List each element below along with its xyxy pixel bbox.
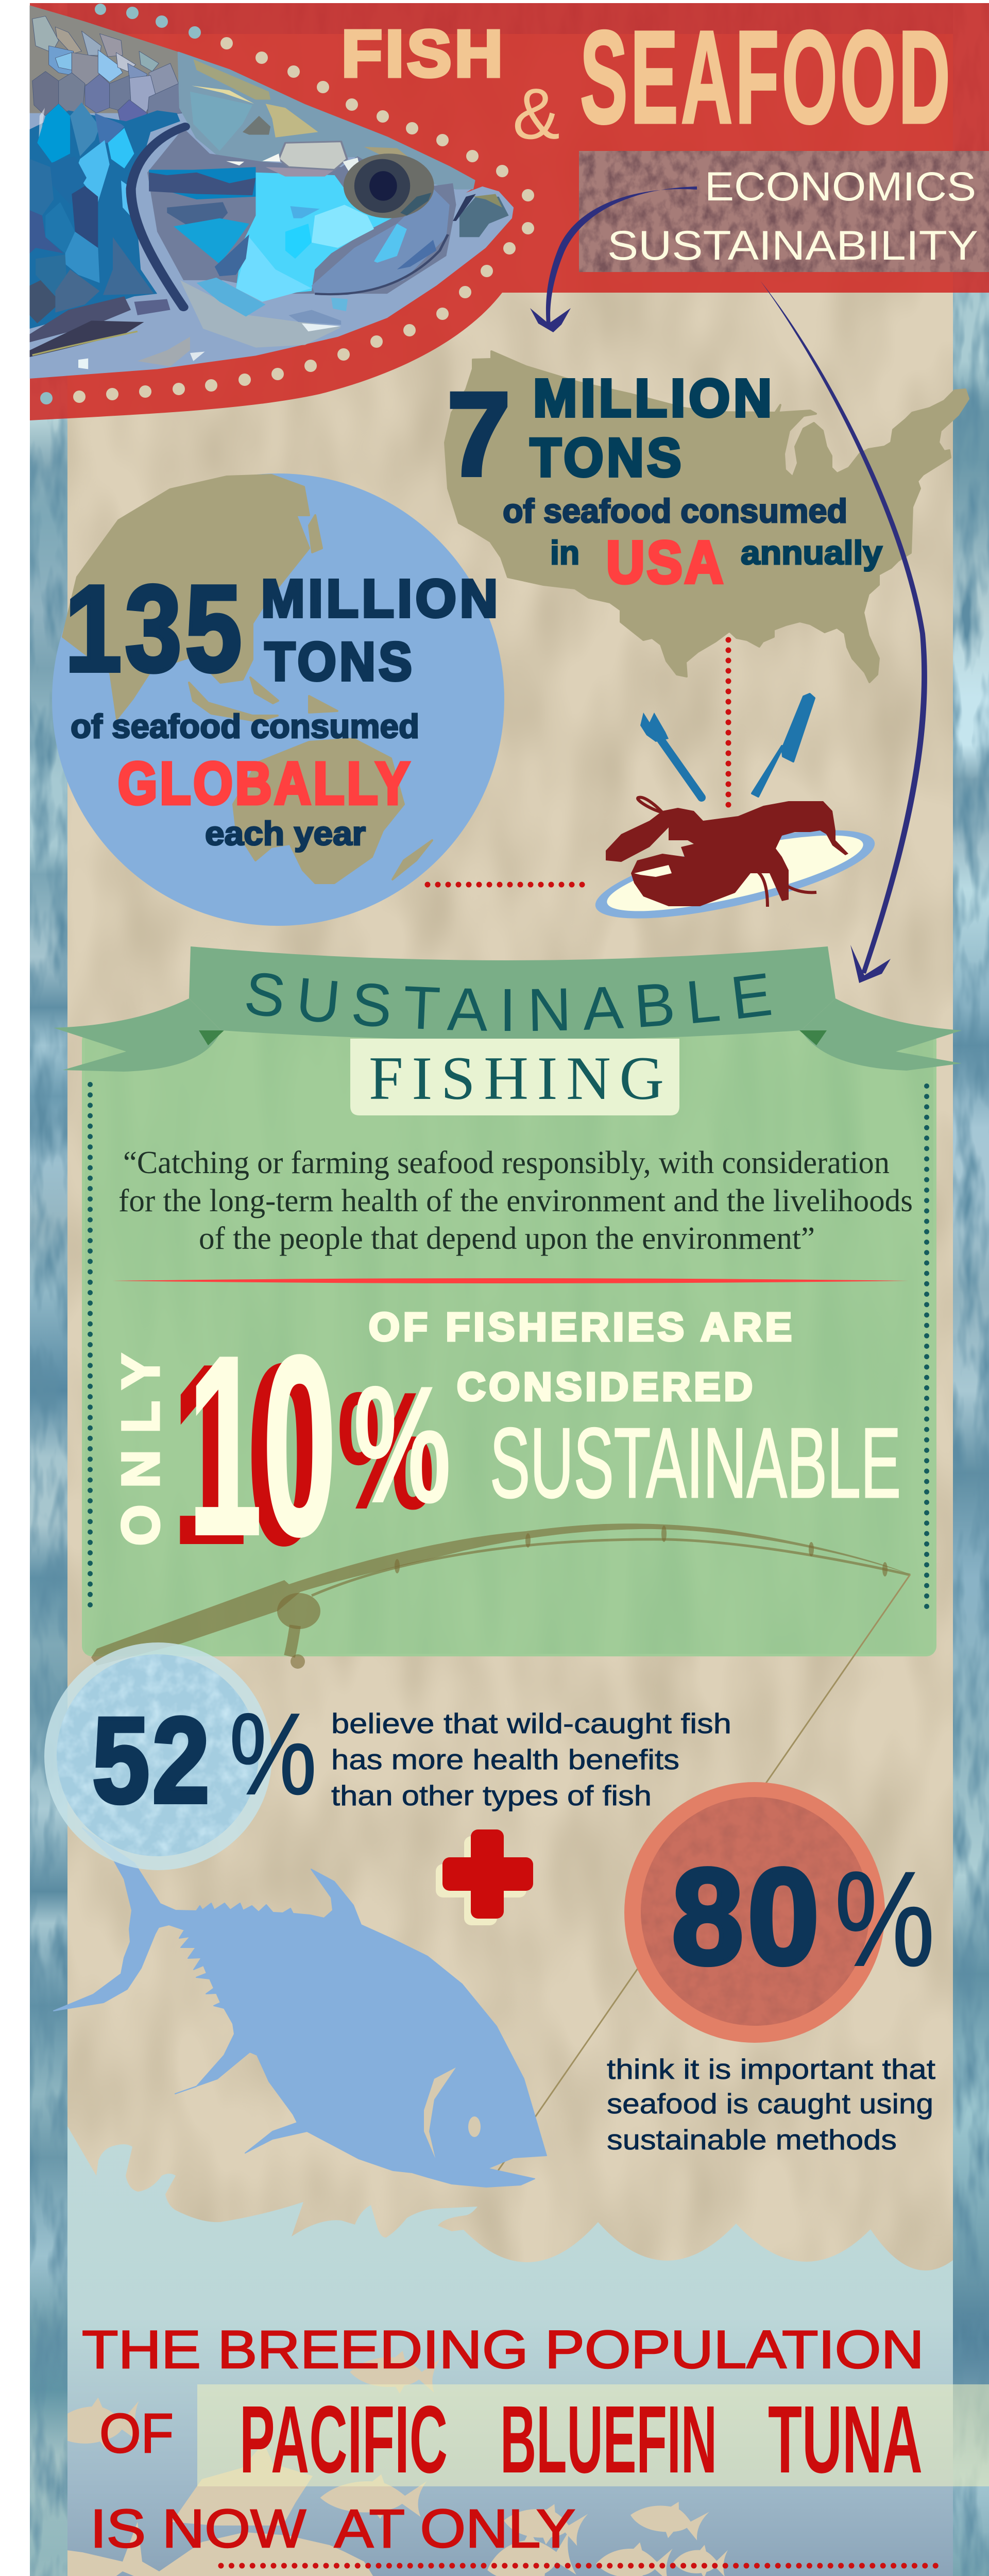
stat: 135 million tons globally: of seafood consumed: [71, 707, 419, 745]
map: continental USA: [445, 351, 968, 682]
text block: definition quote: “Catching or farming seafood responsibly, with consideration: [123, 1145, 890, 1180]
stat: 7 million tons in USA: annually: [741, 534, 882, 571]
stat: 7 million tons in USA: of seafood consumed: [503, 492, 847, 530]
stat circle: 80%: %: [834, 1843, 935, 1994]
stat circle: 52%: 52: [92, 1692, 212, 1828]
decoration: red dotted connectors to lobster: [428, 640, 728, 885]
text block: sustainable methods importance: think it is important that: [607, 2053, 935, 2085]
text block: definition quote: of the people that depend upon the environment”: [199, 1221, 815, 1256]
icon: red plus: [436, 1829, 533, 1925]
stat: 135 million tons globally: [65, 561, 501, 852]
text block: definition quote: for the long-term health of the environment and the livelihoods: [118, 1183, 913, 1218]
heading: breeding population statement: AT ONLY: [334, 2499, 575, 2559]
stat: only 10% of fisheries are considered sustainable: %: [337, 1357, 435, 1544]
text block: sustainable methods importance: [607, 2053, 935, 2156]
illustration: school of small tuna silhouettes: [47, 2347, 728, 2576]
title: Fish & Seafood: &: [513, 73, 560, 154]
panel: ocean water with wave edge: [67, 2126, 953, 2576]
stat: only 10% of fisheries are considered sustainable: 10: [172, 1311, 321, 1598]
stat: 135 million tons globally: each year: [205, 815, 366, 852]
illustration: globe: [52, 473, 504, 926]
illustration: tarpon fish head: [30, 5, 514, 379]
icon: knife: [752, 694, 814, 796]
text block: definition quote: [118, 1145, 913, 1256]
heading: breeding population statement: IS NOW: [90, 2499, 306, 2559]
text block: wild-caught belief: has more health benefits: [331, 1743, 679, 1775]
icon: fork: [640, 713, 702, 798]
stat: 7 million tons in USA: in: [550, 534, 579, 571]
panel: subtitle on textured mauve box: SUSTAINABILITY: [607, 223, 978, 269]
text block: sustainable methods importance: sustainable methods: [607, 2124, 897, 2156]
text block: wild-caught belief: [331, 1707, 731, 1811]
text block: sustainable methods importance: seafood is caught using: [607, 2088, 933, 2120]
heading: breeding population statement: THE BREEDING POPULATION: [82, 2320, 924, 2380]
panel: green sustainable fishing: [82, 1030, 936, 1656]
panel: Pacific Bluefin Tuna highlight: BLUEFIN: [500, 2386, 717, 2493]
stat: 4 percent: [80, 2516, 963, 2576]
panel: Pacific Bluefin Tuna highlight: [197, 2384, 989, 2493]
title: Fish & Seafood: FISH: [342, 17, 506, 91]
banner: Sustainable ribbon: SUSTAINABLE: [246, 973, 772, 1031]
stat circle: 80%: 80: [672, 1840, 823, 1992]
arrow: to USA statistic: [530, 187, 697, 332]
decoration: teal dotted side borders: [90, 1084, 927, 1611]
banner: red header shape: [30, 3, 989, 420]
panel: Pacific Bluefin Tuna highlight: PACIFIC: [240, 2386, 448, 2493]
panel: subtitle on textured mauve box: ECONOMICS: [705, 163, 976, 209]
stat: 7 million tons in USA: USA: [606, 530, 725, 596]
stat: only 10% of fisheries are considered sustainable: CONSIDERED: [457, 1365, 753, 1409]
decoration: dotted border around tarpon: [40, 4, 534, 404]
title: Fish & Seafood: [342, 4, 953, 154]
stat: only 10% of fisheries are considered sustainable: 10: [187, 1302, 337, 1589]
panel: subtitle on textured mauve box: [579, 151, 989, 272]
stat: only 10% of fisheries are considered sustainable: OF FISHERIES ARE: [369, 1305, 792, 1349]
heading: breeding population statement: OF: [99, 2402, 174, 2464]
stat: 135 million tons globally: GLOBALLY: [118, 751, 412, 817]
divider: red tapered line: [112, 1278, 908, 1283]
stat: only 10% of fisheries are considered sustainable: %: [353, 1351, 451, 1538]
text block: wild-caught belief: than other types of fish: [331, 1780, 652, 1811]
stat: 135 million tons globally: 135: [65, 561, 245, 697]
heading: Fishing label: FISHING: [369, 1044, 664, 1112]
stat: only 10% of fisheries are considered sustainable: [111, 1302, 901, 1598]
heading: breeding population statement: [82, 2320, 924, 2559]
stat circle: 52%: [44, 1642, 317, 1870]
stat: 135 million tons globally: MILLION: [261, 569, 501, 628]
text block: wild-caught belief: believe that wild-caught fish: [331, 1707, 731, 1739]
illustration: lobster on plate: [589, 798, 881, 937]
illustration: fishing rod and line: [91, 1523, 910, 2171]
stat: only 10% of fisheries are considered sustainable: ONLY: [111, 1354, 170, 1546]
stat: 7 million tons in USA: TONS: [530, 428, 685, 488]
stat circle: 80%: [624, 1782, 935, 2043]
stat: 7 million tons in USA: MILLION: [533, 368, 775, 428]
stat: 7 million tons in USA: [447, 368, 882, 596]
stat: 7 million tons in USA: 7: [447, 368, 510, 500]
stat: 135 million tons globally: TONS: [265, 632, 415, 692]
arrow: to Sustainability section: [760, 281, 927, 983]
stat circle: 52%: %: [229, 1689, 317, 1819]
decoration: red dotted rules around 4 percent: [221, 2566, 942, 2576]
banner: Sustainable ribbon: [54, 946, 961, 1072]
illustration: bluefin tuna silhouette: [54, 1828, 547, 2187]
